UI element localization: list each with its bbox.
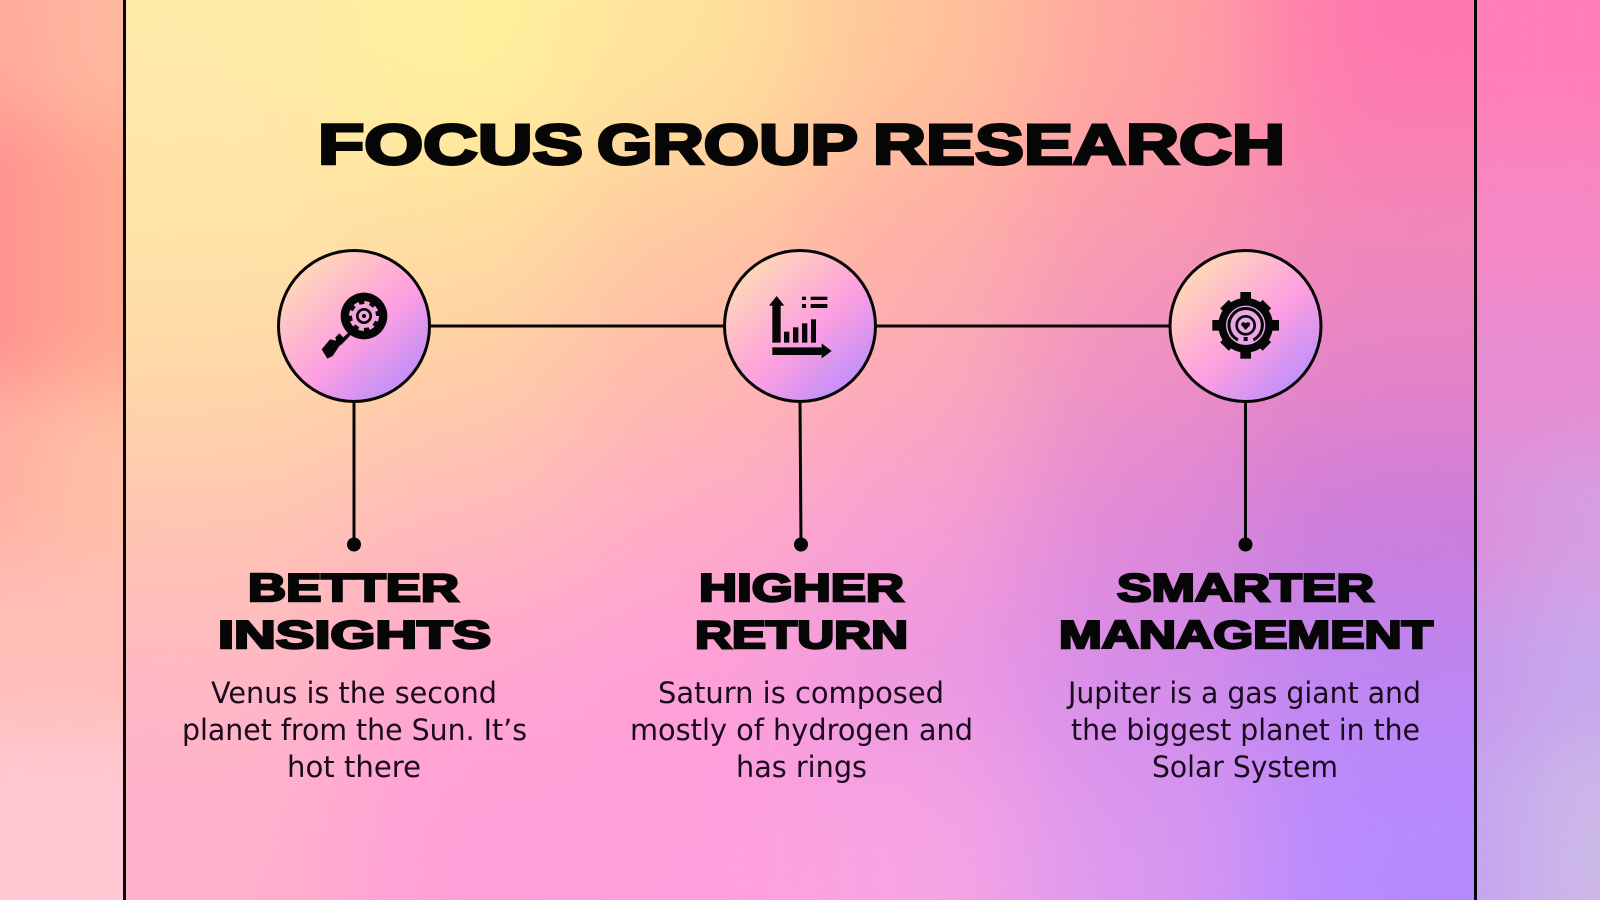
title: GROUP: [597, 113, 858, 177]
body text: venus: [182, 676, 527, 784]
background: left strip: [0, 0, 124, 900]
heading: higher return: [695, 567, 908, 657]
icon: bar chart with arrows: [769, 296, 832, 358]
body text: venus: planet from the Sun. It’s: [182, 713, 527, 747]
heading: smarter management: [1059, 567, 1433, 657]
background: right strip: [1476, 0, 1600, 900]
body text: saturn: Saturn is composed: [658, 676, 944, 710]
heading: better insights: [218, 567, 491, 657]
heading: higher return: RETURN: [695, 614, 908, 657]
body text: venus: Venus is the second: [211, 676, 497, 710]
body text: saturn: [630, 676, 973, 784]
stem and dot 3: [1238, 402, 1252, 552]
body text: jupiter: the biggest planet in the: [1071, 713, 1420, 747]
column: better insights: [182, 250, 527, 784]
body text: saturn: mostly of hydrogen and: [630, 713, 973, 747]
heading: smarter management: SMARTER: [1117, 567, 1374, 610]
icon: gear with heart target: [1212, 292, 1279, 359]
circle 1: [278, 250, 430, 402]
stem and dot 2: [794, 402, 808, 552]
column: smarter management: [1059, 250, 1433, 784]
icon: magnifier with gear: [322, 293, 387, 359]
circle 3: [1170, 250, 1321, 402]
heading: higher return: HIGHER: [699, 567, 904, 610]
title: RESEARCH: [873, 113, 1285, 177]
heading: better insights: INSIGHTS: [218, 614, 491, 657]
body text: jupiter: Solar System: [1152, 750, 1338, 784]
body text: jupiter: Jupiter is a gas giant and: [1066, 676, 1421, 710]
title: [318, 113, 1285, 177]
column: higher return: [630, 250, 973, 784]
circle 2: [724, 250, 876, 402]
stem and dot 1: [347, 402, 361, 552]
heading: smarter management: MANAGEMENT: [1059, 614, 1433, 657]
body text: jupiter: [1066, 676, 1421, 784]
title: FOCUS: [318, 113, 583, 177]
heading: better insights: BETTER: [248, 567, 459, 610]
body text: saturn: has rings: [736, 750, 867, 784]
body text: venus: hot there: [287, 750, 421, 784]
timeline connector: [430, 324, 1169, 328]
